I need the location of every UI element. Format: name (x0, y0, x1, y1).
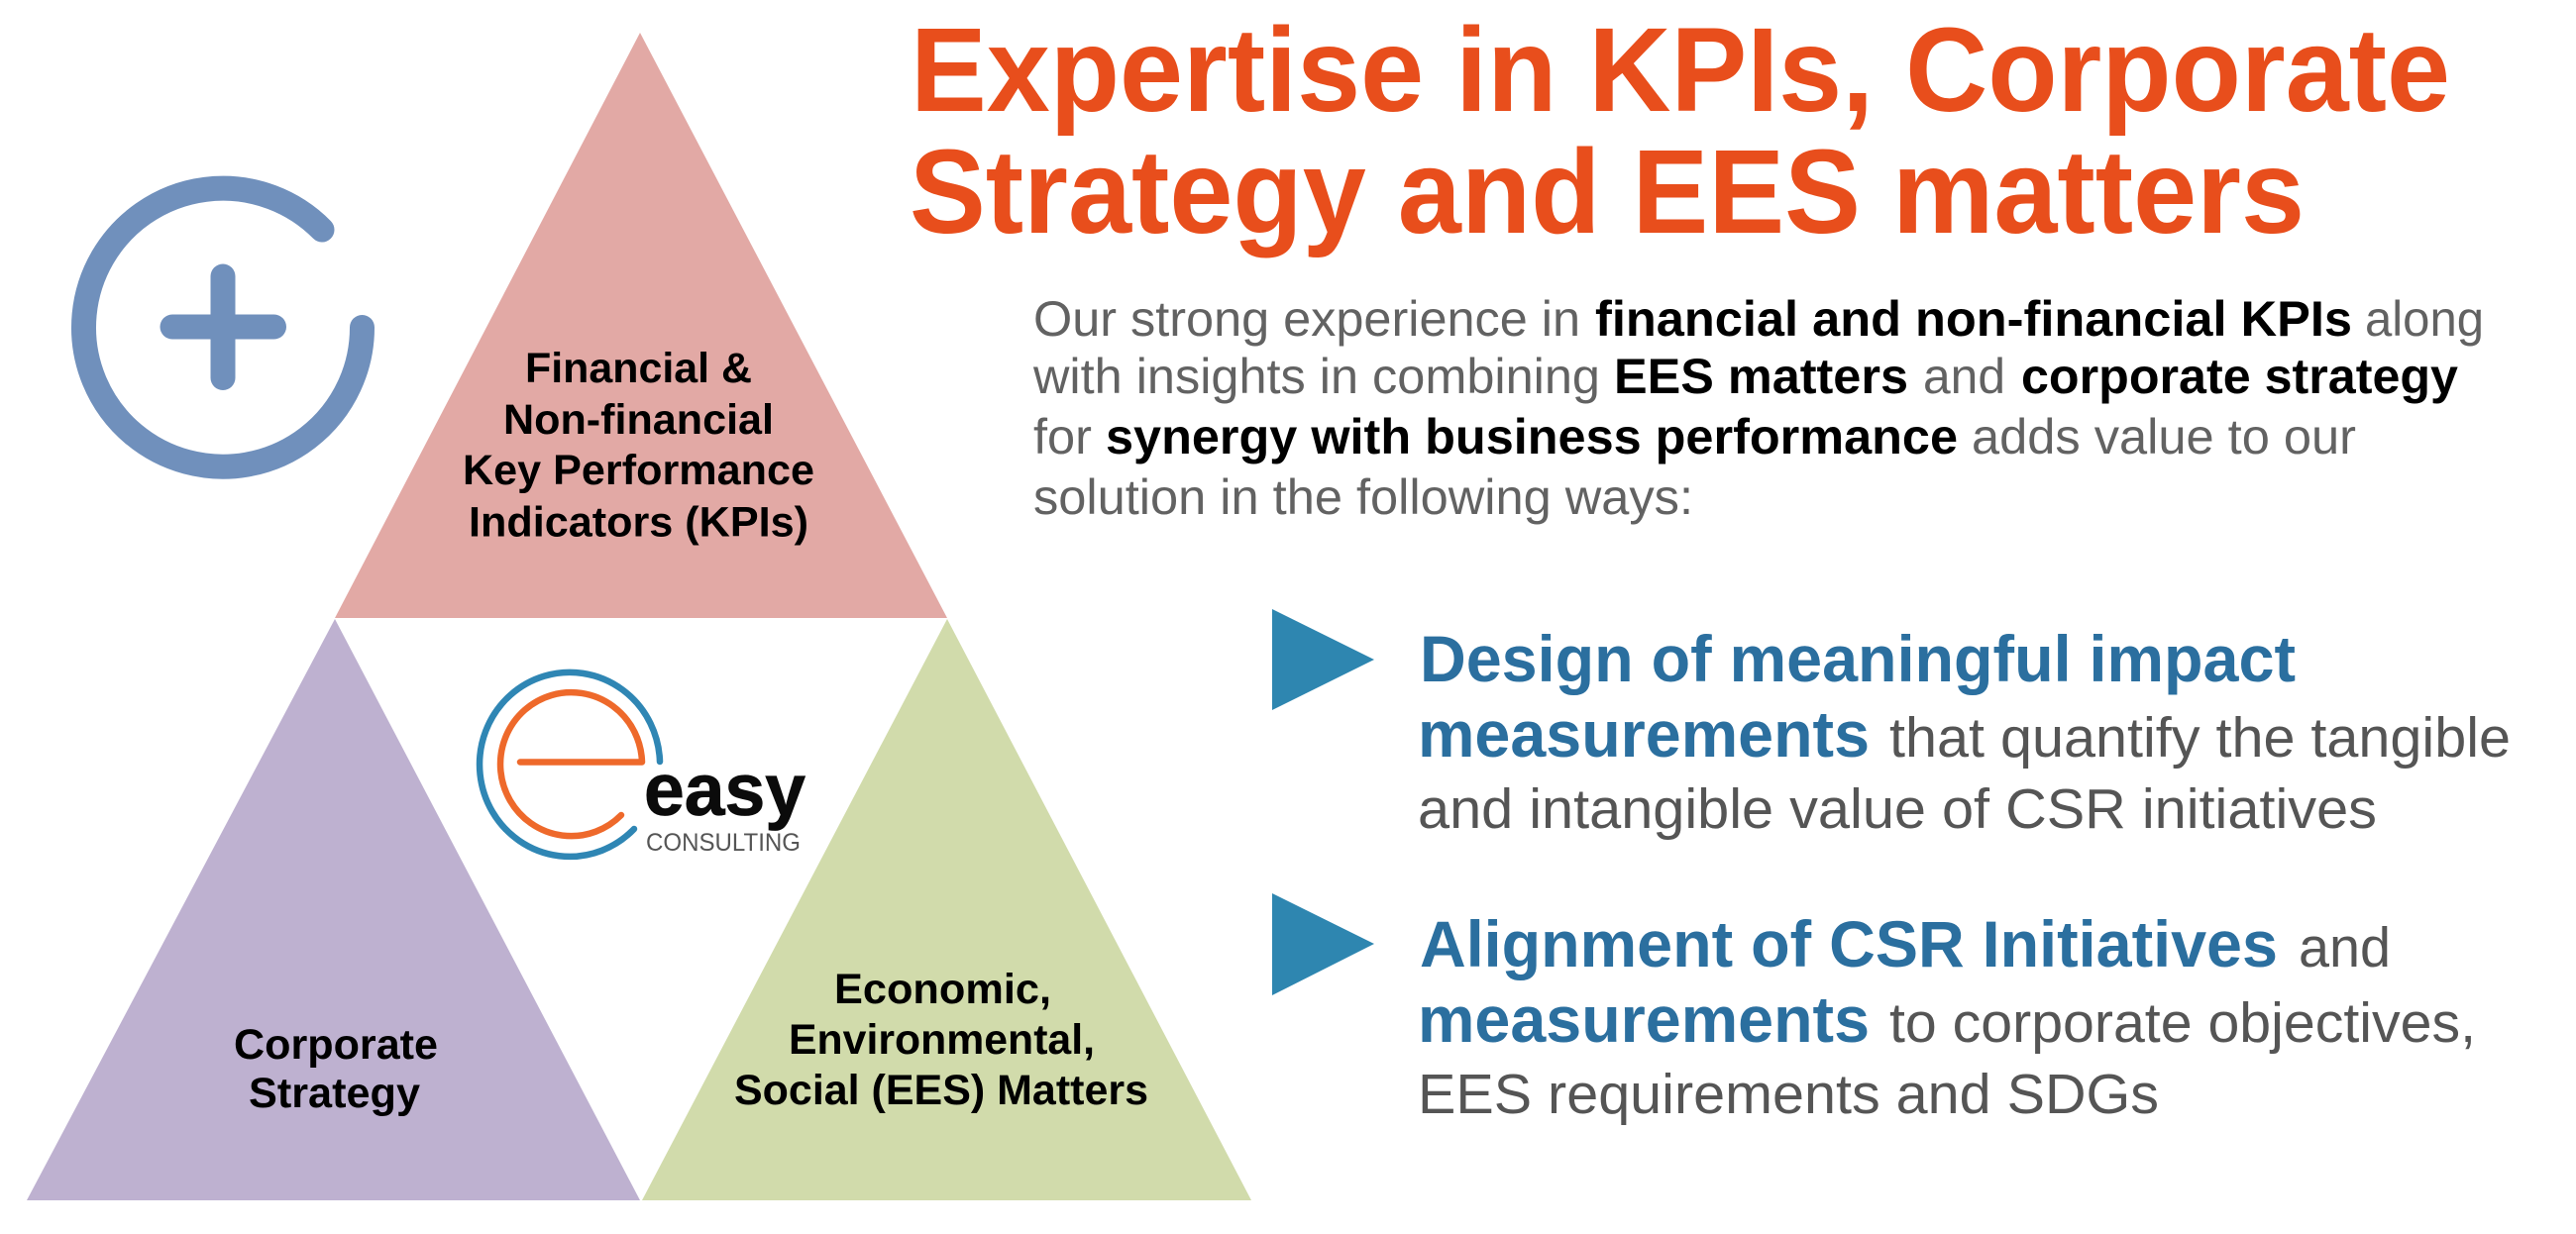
panel: KPI triangle: Non-financial (503, 396, 774, 444)
intro paragraph: and (1923, 349, 2005, 404)
intro paragraph: along (2365, 291, 2484, 347)
title (910, 2, 2450, 258)
panel: EES matters triangle: Environmental, (789, 1016, 1095, 1064)
text: impact measurements: and intangible value of CSR initiatives (1418, 777, 2377, 841)
panel: corporate strategy triangle: Strategy (249, 1070, 420, 1117)
text: alignment of initiatives: measurements (1418, 982, 1870, 1056)
text: alignment of initiatives: and (2299, 916, 2391, 979)
panel: corporate strategy triangle: Corporate (234, 1021, 438, 1069)
intro paragraph: Our strong experience in (1033, 291, 1580, 347)
intro paragraph: with insights in combining (1032, 349, 1600, 404)
panel: KPI triangle: Key Performance (463, 447, 814, 494)
title: Expertise in KPIs, Corporate (911, 2, 2450, 137)
text: alignment of initiatives: EES requirements and SDGs (1418, 1063, 2159, 1126)
logo: easy consulting (480, 672, 805, 857)
panel: corporate strategy triangle (27, 619, 640, 1200)
intro paragraph: synergy with business performance (1106, 409, 1958, 464)
text: impact measurements: Design of meaningful impact (1420, 622, 2296, 695)
intro paragraph: adds value to our (1972, 409, 2356, 464)
panel: EES matters triangle: Economic, (834, 966, 1051, 1013)
intro paragraph: corporate strategy (2021, 349, 2458, 404)
text: impact measurements: measurements (1418, 697, 1870, 771)
title: Strategy and EES matters (910, 124, 2305, 258)
icon: circled plus (84, 188, 363, 466)
text: alignment of initiatives (1418, 907, 2476, 1126)
text: impact measurements (1418, 622, 2511, 841)
panel: KPI triangle: Indicators (KPIs) (469, 499, 808, 547)
intro paragraph: EES matters (1614, 349, 1908, 404)
arrow: first point (1272, 609, 1374, 710)
arrow: second point (1272, 893, 1374, 995)
intro paragraph: for (1033, 409, 1092, 464)
text: impact measurements: that quantify the tangible (1889, 706, 2511, 770)
intro paragraph: solution in the following ways: (1033, 469, 1693, 525)
panel: EES matters triangle (642, 619, 1251, 1200)
panel: KPI triangle (335, 33, 947, 618)
panel: EES matters triangle: Social (EES) Matters (734, 1067, 1148, 1114)
intro paragraph: financial and non-financial KPIs (1595, 291, 2352, 347)
intro paragraph (1032, 291, 2484, 525)
logo: easy consulting: CONSULTING (646, 829, 801, 857)
text: alignment of initiatives: Alignment of CSR Initiatives (1420, 907, 2278, 980)
panel: KPI triangle: Financial & (525, 345, 752, 392)
text: alignment of initiatives: to corporate objectives, (1889, 991, 2476, 1055)
logo: easy consulting: easy (644, 749, 805, 831)
